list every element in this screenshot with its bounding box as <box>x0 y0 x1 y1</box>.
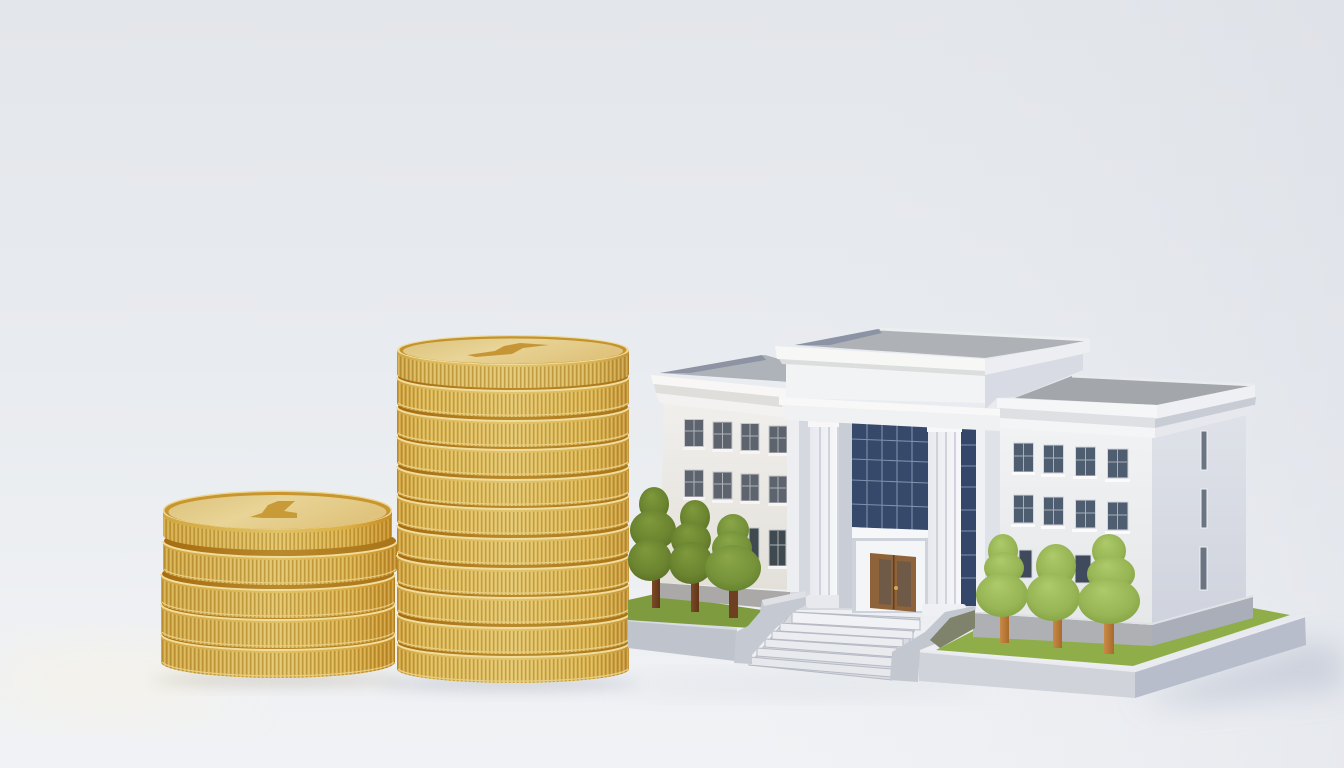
left pier <box>787 416 810 592</box>
cornice <box>651 375 790 418</box>
door <box>870 553 916 612</box>
right stair railing <box>890 606 975 682</box>
front wall <box>1000 425 1152 625</box>
base platform: left <box>628 620 737 661</box>
lawn: right <box>936 608 1290 666</box>
tree 1 <box>628 487 676 608</box>
roof <box>660 355 790 382</box>
glass curtain wall: right <box>961 428 976 606</box>
tree B <box>1026 544 1080 648</box>
tree 3 <box>705 514 761 618</box>
coin stack: short <box>161 490 397 678</box>
centre cornice and frieze <box>775 346 1000 431</box>
side wall <box>1152 412 1246 624</box>
ground shadows <box>153 640 1344 705</box>
cornice <box>997 385 1256 438</box>
centre roof <box>795 329 1090 358</box>
door surround <box>848 527 928 613</box>
recess wall <box>790 415 1000 610</box>
central block <box>775 329 1090 616</box>
column: left <box>806 420 842 608</box>
coin emboss mark <box>467 343 549 357</box>
coin emboss mark <box>250 501 297 518</box>
trees: left group <box>628 487 761 618</box>
centre side <box>985 340 1090 410</box>
tree A <box>976 534 1028 643</box>
left wing <box>651 355 790 610</box>
bank building <box>628 329 1306 698</box>
column: right <box>922 425 966 616</box>
windows: left wing <box>684 420 787 566</box>
lawn: left <box>628 594 762 628</box>
top coin <box>397 335 629 388</box>
entrance steps <box>749 612 920 680</box>
right wing <box>973 376 1256 646</box>
side slit windows <box>1200 431 1207 590</box>
left stair railing <box>734 591 806 664</box>
base platform: right <box>919 616 1306 698</box>
coin stack: tall <box>397 335 629 683</box>
windows: right wing <box>1014 443 1128 583</box>
top coin <box>163 490 392 550</box>
tree C <box>1078 534 1140 654</box>
glass curtain wall: centre <box>852 422 928 531</box>
right pier <box>976 412 1000 612</box>
tree 2 <box>669 500 713 612</box>
trees: right group <box>976 534 1140 654</box>
plinth <box>973 596 1253 646</box>
plinth <box>660 583 790 610</box>
roof <box>1015 376 1255 405</box>
wall <box>660 402 790 590</box>
